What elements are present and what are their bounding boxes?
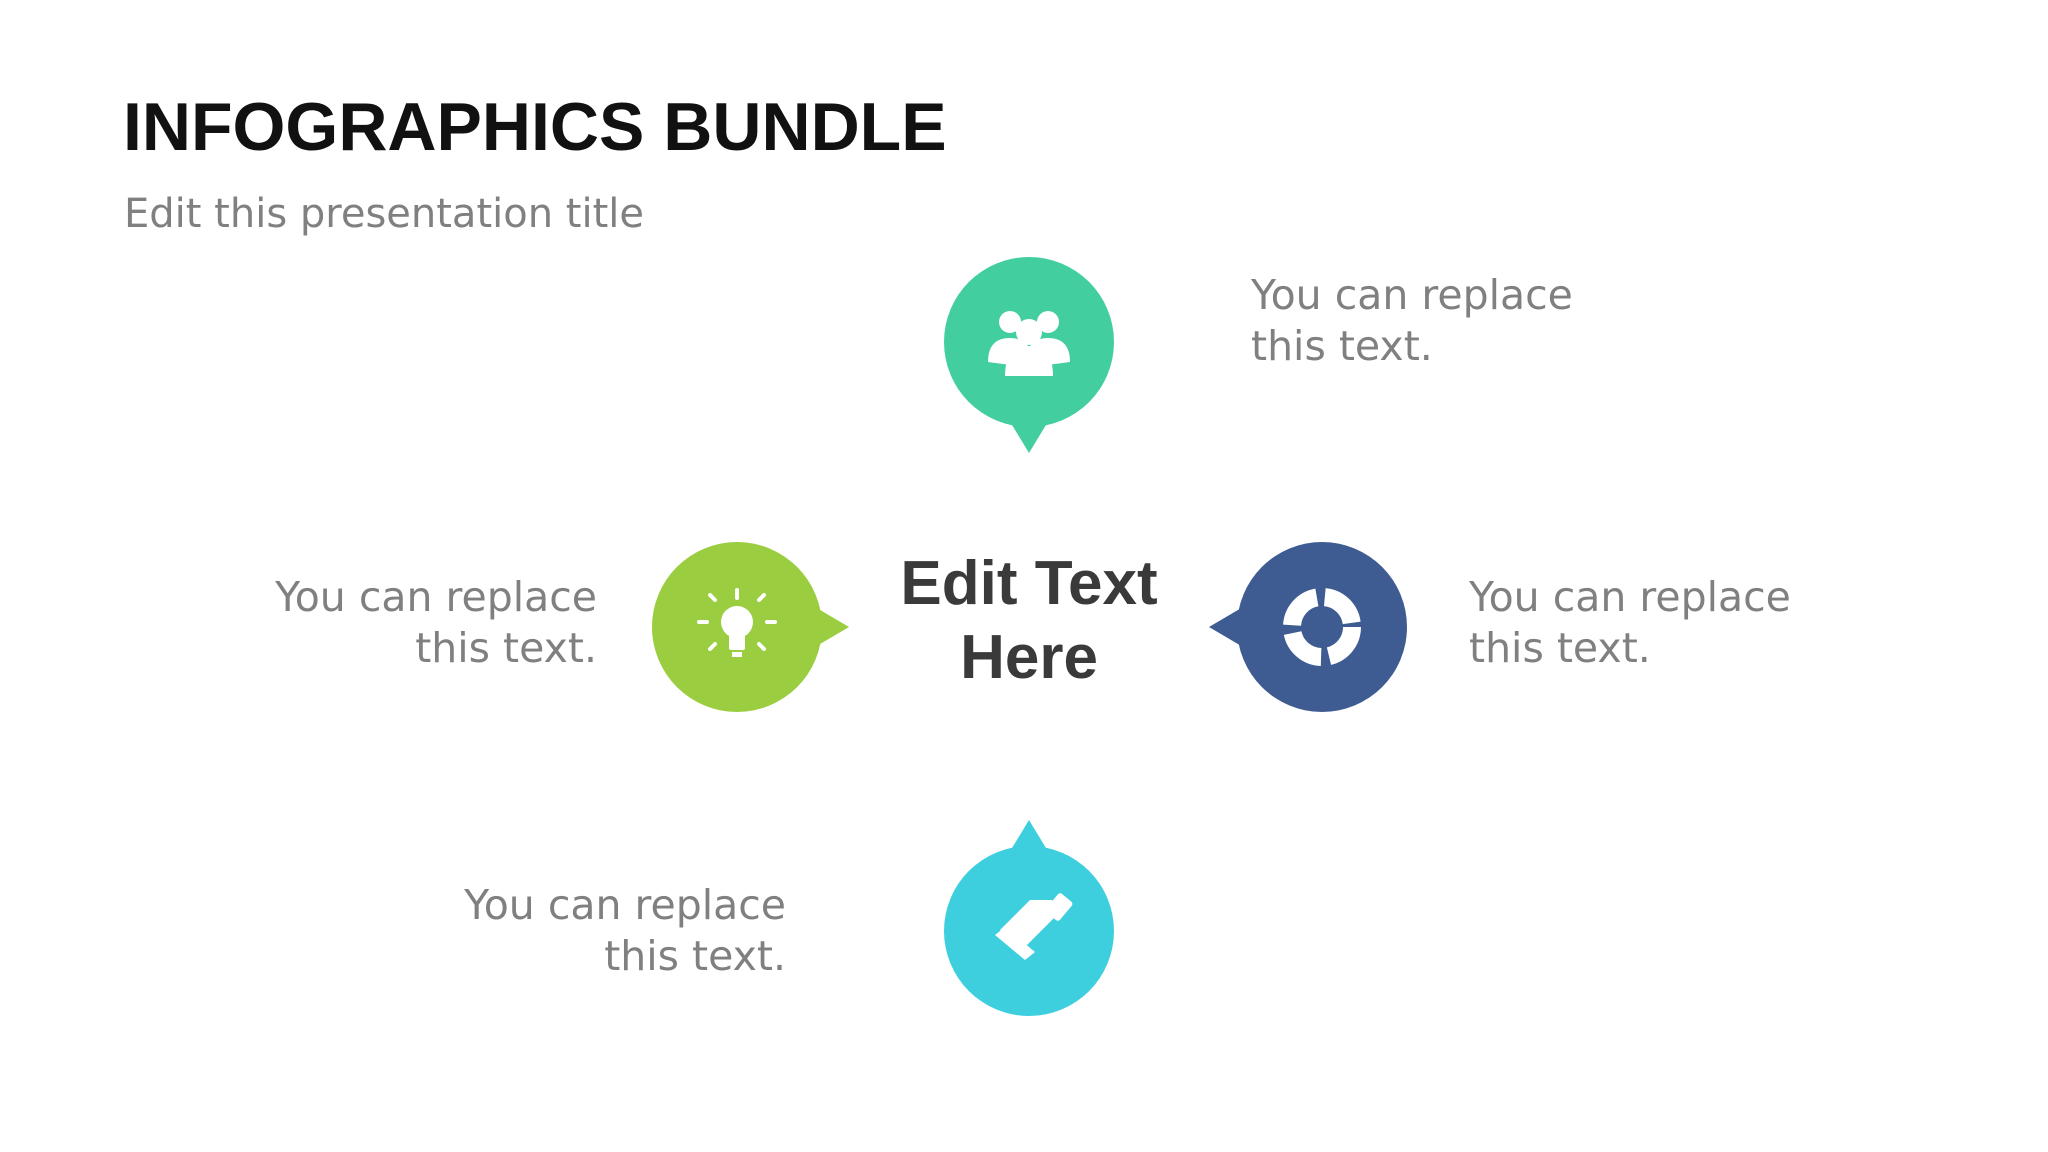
- text bottom: this text.: [604, 932, 786, 980]
- text left: this text.: [415, 624, 597, 672]
- text top: this text.: [1251, 322, 1433, 370]
- text right: [1469, 573, 1791, 672]
- marker: left lightbulb: [652, 542, 849, 712]
- text left: [275, 573, 597, 672]
- text top: [1251, 271, 1573, 370]
- text bottom: You can replace: [464, 881, 786, 929]
- center text line 2: Here: [960, 623, 1098, 692]
- marker: right cycle: [1209, 542, 1407, 712]
- text top: You can replace: [1251, 271, 1573, 319]
- marker: bottom handshake: [944, 820, 1114, 1016]
- center text: Edit Text: [900, 549, 1158, 618]
- marker: top people: [944, 257, 1114, 453]
- text bottom: [464, 881, 786, 980]
- title: INFOGRAPHICS BUNDLE: [123, 89, 947, 165]
- text right: You can replace: [1469, 573, 1791, 621]
- subtitle: Edit this presentation title: [124, 191, 644, 237]
- text left: You can replace: [275, 573, 597, 621]
- text right: this text.: [1469, 624, 1651, 672]
